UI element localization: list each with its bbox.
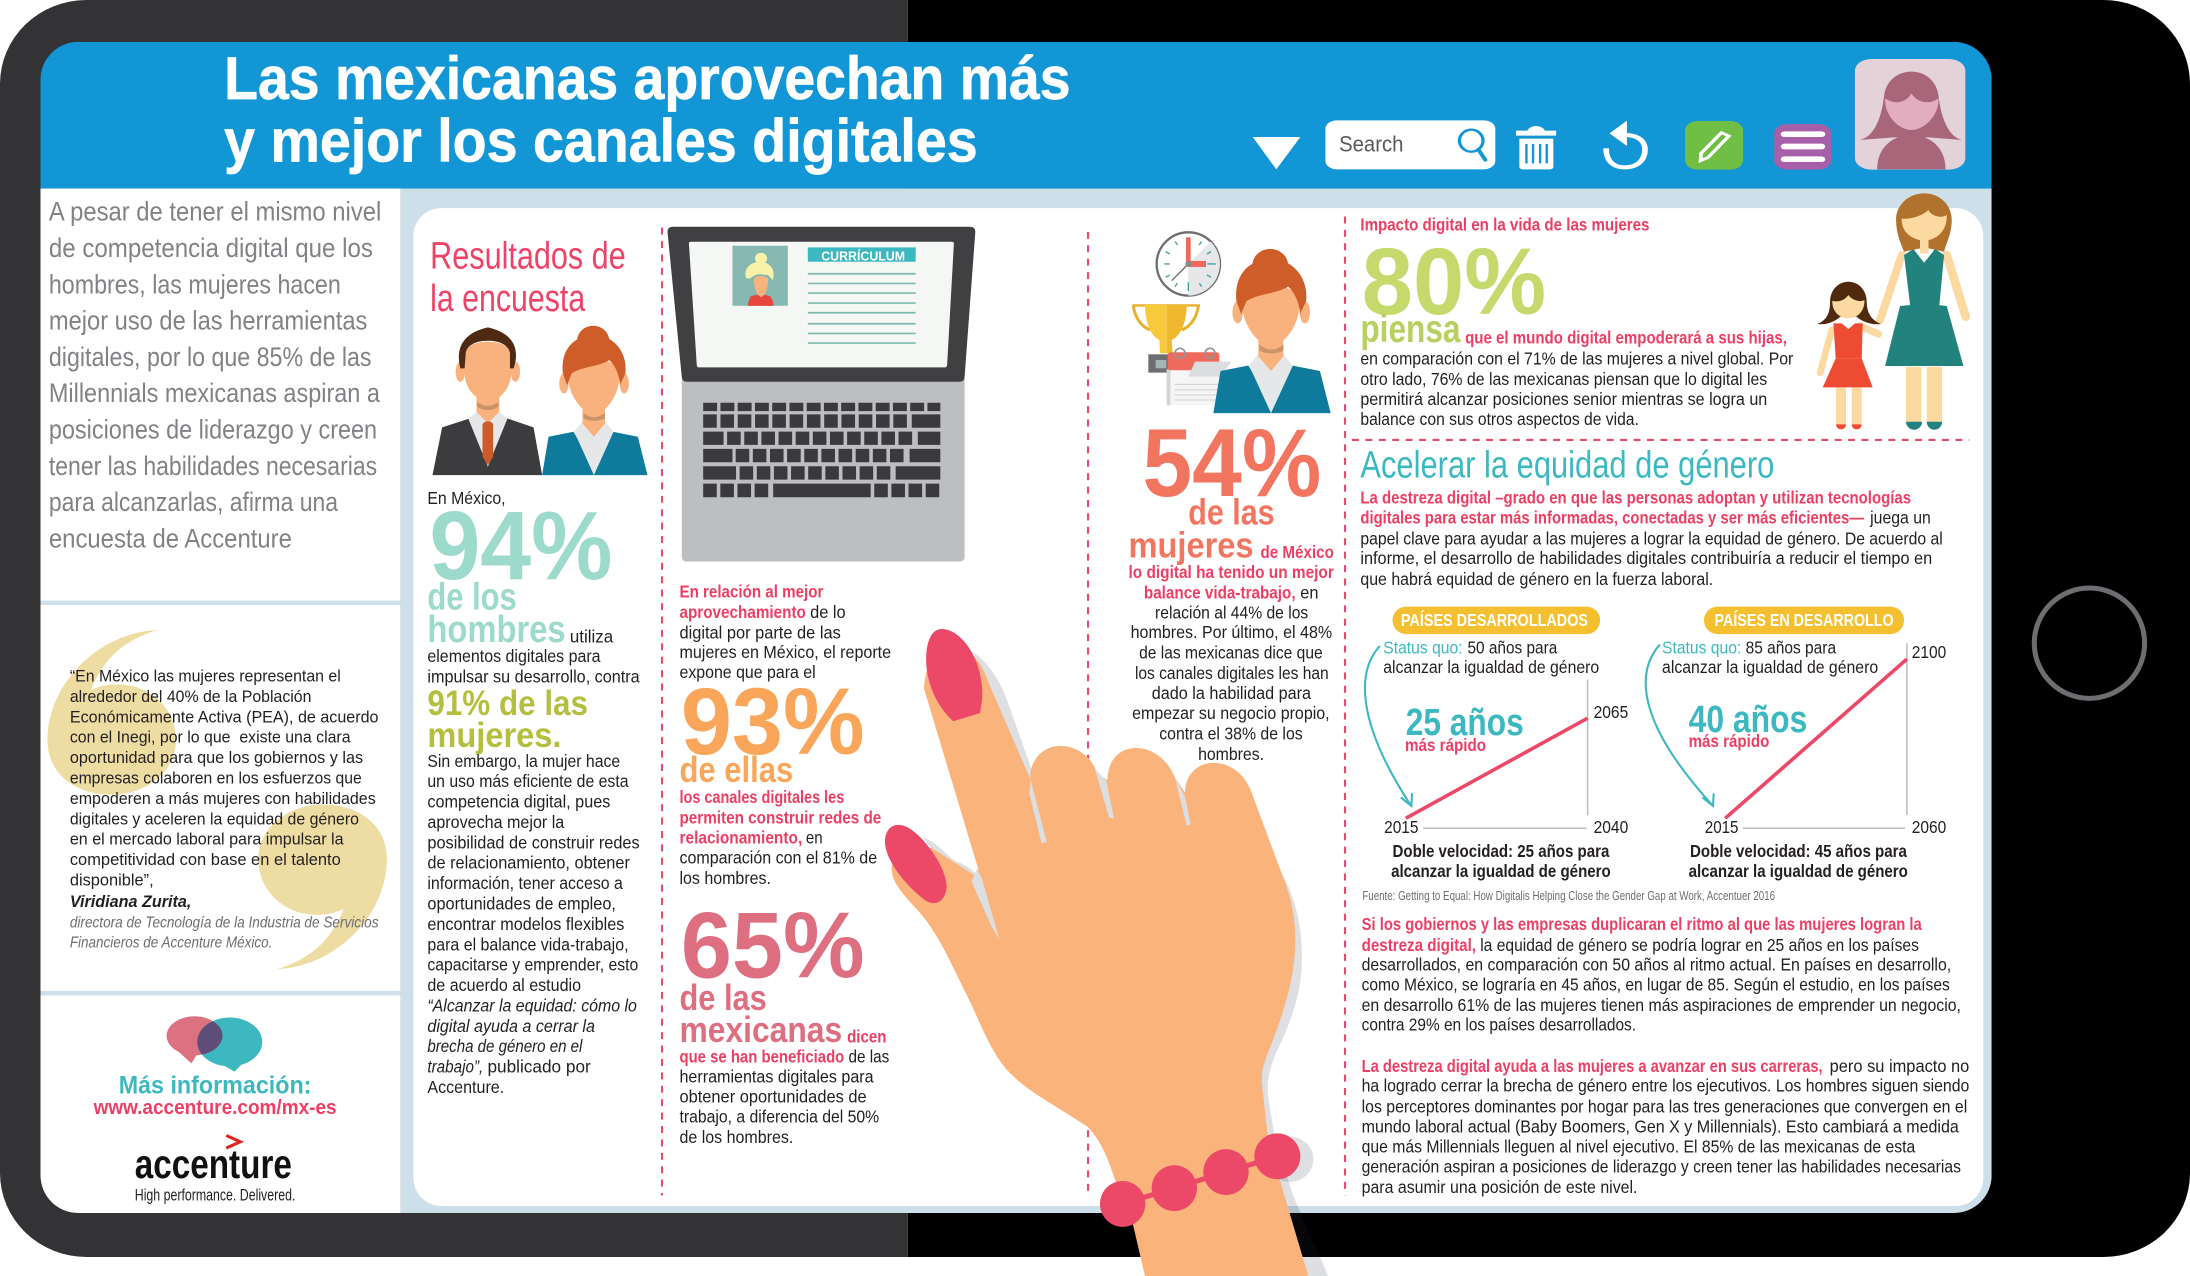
quote text: Viridiana Zurita, bbox=[70, 892, 191, 911]
column 3 text: 54 percent: hombres. bbox=[1198, 744, 1264, 764]
intro text: digitales, por lo que 85% de las bbox=[49, 342, 372, 372]
title: Las mexicanas aprovechan más bbox=[224, 45, 1071, 112]
column 1 text: 94 percent: para el balance vida-trabajo, bbox=[427, 934, 629, 954]
paragraph: destreza digital: informe, el desarrollo de habilidades digitales contribuiría a reducir el tiempo en bbox=[1360, 548, 1932, 568]
column 2 text: 65 percent: de los hombres. bbox=[679, 1127, 793, 1147]
icon: speech bubbles bbox=[167, 1016, 262, 1072]
column 2 text: 93 percent: de lo bbox=[810, 602, 846, 622]
quote text: directora de Tecnología de la Industria de Servicios bbox=[70, 914, 379, 931]
column 2 text: 93 percent: de ellas bbox=[679, 749, 793, 790]
pill label: PAÍSES EN DESARROLLO bbox=[1715, 609, 1894, 630]
column 2 text: 65 percent: obtener oportunidades de bbox=[679, 1087, 867, 1107]
column 3 text: 54 percent: en bbox=[1300, 582, 1318, 602]
accenture logo: High performance. Delivered. bbox=[135, 1186, 295, 1205]
paragraph: carreras: La destreza digital ayuda a las mujeres a avanzar en sus carreras, bbox=[1362, 1056, 1823, 1076]
column 1 text: 94 percent: impulsar su desarrollo, contra bbox=[427, 666, 640, 686]
quote text: Económicamente Activa (PEA), de acuerdo bbox=[70, 707, 379, 726]
chart: países en desarrollo: Status quo: bbox=[1662, 637, 1741, 657]
column 1 text: 94 percent: encontrar modelos flexibles bbox=[427, 914, 625, 934]
column 4 text: 80 percent: en comparación con el 71% de las mujeres a nivel global. Por bbox=[1360, 349, 1794, 369]
column 4 text: 80 percent bbox=[1360, 214, 1794, 429]
column 3 text: 54 percent bbox=[1129, 410, 1334, 764]
intro text: Millennials mexicanas aspiran a bbox=[49, 378, 380, 408]
quote text: con el Inegi, por lo que existe una clara bbox=[70, 728, 351, 747]
paragraph: duplicar el ritmo: como México, se lograría en 45 años, en lugar de 85. Según el estudio, en los países bbox=[1362, 975, 1950, 995]
paragraph: destreza digital: que habrá equidad de género en la fuerza laboral. bbox=[1360, 569, 1713, 589]
more info link: Más información: bbox=[119, 1072, 311, 1100]
quote text: digitales y aceleren la equidad de género bbox=[70, 809, 359, 828]
pill label bbox=[1392, 607, 1600, 634]
column 2 text: 65 percent: de las bbox=[848, 1047, 890, 1067]
illustration: clock, trophy, calendar, businesswoman bbox=[1132, 232, 1331, 413]
column 1 text: 94 percent: aprovecha mejor la bbox=[427, 812, 565, 832]
more info link bbox=[93, 1072, 337, 1119]
heading: Resultados de la encuesta: Resultados de bbox=[430, 235, 626, 277]
paragraph: carreras: los perceptores dominantes por hogar para las tres generaciones que convergen en el bbox=[1362, 1096, 1967, 1116]
chart: países desarrollados: alcanzar la igualdad de género bbox=[1383, 657, 1599, 677]
column 1 text: 94 percent: publicado por bbox=[487, 1057, 591, 1077]
intro text: posiciones de liderazgo y creen bbox=[49, 415, 377, 445]
column 1 text: 94 percent: hombres bbox=[427, 608, 566, 650]
intro text: mejor uso de las herramientas bbox=[49, 306, 367, 336]
column 2 text: 65 percent: trabajo, a diferencia del 50% bbox=[679, 1107, 879, 1127]
paragraph: destreza digital: juega un bbox=[1869, 508, 1931, 528]
column 1 text: 94 percent: 94% bbox=[429, 491, 612, 600]
column 3 text: 54 percent: mujeres bbox=[1129, 524, 1254, 565]
paragraph: carreras: generación aspiran a posiciones de liderazgo y creen tener las habilidades necesarias bbox=[1362, 1157, 1961, 1177]
paragraph: carreras: que más Millennials lleguen al nivel ejecutivo. El 85% de las mexicanas de esta bbox=[1362, 1137, 1916, 1157]
chart: países desarrollados: 2015 bbox=[1384, 817, 1418, 837]
chart: países desarrollados: 2065 bbox=[1594, 702, 1628, 722]
heading: Resultados de la encuesta: la encuesta bbox=[430, 277, 585, 319]
paragraph: destreza digital bbox=[1360, 488, 1943, 589]
search label: Search bbox=[1339, 132, 1403, 157]
paragraph: carreras: ha logrado cerrar la brecha de género entre los ejecutivos. Los hombres siguen siendo bbox=[1362, 1076, 1969, 1096]
paragraph: duplicar el ritmo: Si los gobiernos y las empresas duplicaran el ritmo al que las mujeres logran la bbox=[1362, 914, 1922, 934]
heading: Resultados de la encuesta bbox=[430, 235, 626, 319]
column 1 text: 94 percent bbox=[427, 488, 640, 1097]
source note: Fuente: Getting to Equal: How Digitalis Helping Close the Gender Gap at Work, Accentuer 2016 bbox=[1362, 889, 1775, 903]
paragraph: duplicar el ritmo: la equidad de género se podría lograr en 25 años en los países bbox=[1480, 935, 1919, 955]
column 2 text: 65 percent: de las bbox=[679, 977, 767, 1018]
chart: países en desarrollo: más rápido bbox=[1689, 731, 1769, 751]
column 1 text: 94 percent: de relacionamiento, obtener bbox=[427, 853, 630, 873]
quote text: empoderen a más mujeres con habilidades bbox=[70, 789, 376, 808]
illustration: laptop with curriculum bbox=[667, 227, 975, 561]
icon: dropdown triangle, search box, trash, undo, pencil, menu, avatar bbox=[1253, 59, 1965, 170]
chart: países en desarrollo bbox=[1646, 607, 1947, 881]
column 1 text: 94 percent: de acuerdo al estudio bbox=[427, 975, 581, 995]
column 3 text: 54 percent: balance vida-trabajo, bbox=[1144, 582, 1296, 602]
column 1 text: 94 percent: trabajo”, bbox=[427, 1057, 483, 1077]
quote text: Financieros de Accenture México. bbox=[70, 935, 272, 952]
chart: países en desarrollo: Doble velocidad: 45 años para bbox=[1690, 841, 1907, 861]
pill label bbox=[1704, 607, 1904, 634]
chart: países desarrollados: más rápido bbox=[1405, 735, 1486, 755]
column 2 text: 65 percent: mexicanas bbox=[679, 1009, 842, 1050]
chart: países en desarrollo: 40 años bbox=[1689, 698, 1807, 740]
column 2 text: 93 percent: aprovechamiento bbox=[679, 602, 806, 622]
chart: países en desarrollo: 2100 bbox=[1912, 642, 1947, 662]
column 2 text: 93 percent: permiten construir redes de bbox=[679, 807, 882, 827]
header toolbar bbox=[1253, 59, 1965, 170]
chart: países en desarrollo: alcanzar la igualdad de género bbox=[1689, 861, 1908, 881]
column 2 text: 65 percent bbox=[679, 893, 890, 1147]
quote text: empresas colaboren en los esfuerzos que bbox=[70, 769, 362, 788]
column 1 text: 94 percent: utiliza bbox=[570, 626, 613, 646]
column 4 text: 80 percent: otro lado, 76% de las mexicanas piensan que lo digital les bbox=[1360, 369, 1767, 389]
column 2 text: 93 percent: digital por parte de las bbox=[679, 622, 841, 642]
chart: países desarrollados: Doble velocidad: 25 años para bbox=[1392, 841, 1610, 861]
column 3 text: 54 percent: relación al 44% de los bbox=[1155, 602, 1309, 622]
column 2 text: 93 percent: 93% bbox=[681, 669, 865, 775]
column 1 text: 94 percent: brecha de género en el bbox=[427, 1036, 583, 1056]
chart: países en desarrollo: 2015 bbox=[1705, 817, 1738, 837]
intro text: de competencia digital que los bbox=[49, 233, 373, 263]
paragraph: duplicar el ritmo: desarrollados, en comparación con 50 años al ritmo actual. En países en desarrollo, bbox=[1362, 955, 1951, 975]
column 3 text: 54 percent: contra el 38% de los bbox=[1159, 724, 1303, 744]
paragraph: destreza digital: digitales para estar más informadas, conectadas y ser más eficientes— bbox=[1360, 508, 1865, 528]
more info link: www.accenture.com/mx-es bbox=[93, 1097, 337, 1119]
column 1 text: 94 percent: Accenture. bbox=[427, 1077, 504, 1097]
column 2 text: 93 percent: en bbox=[806, 828, 823, 848]
chart: países desarrollados: Status quo: bbox=[1383, 637, 1463, 657]
quote text: alrededor del 40% de la Población bbox=[70, 687, 311, 706]
chart: países desarrollados: alcanzar la igualdad de género bbox=[1391, 861, 1611, 881]
chart: países desarrollados bbox=[1365, 607, 1629, 881]
dashed dividers bbox=[662, 216, 1969, 1196]
chart: países en desarrollo: 2060 bbox=[1912, 817, 1947, 837]
illustration: pointing hand with bracelet bbox=[885, 629, 1328, 1276]
quote text: “En México las mujeres representan el bbox=[70, 667, 341, 686]
column 1 text: 94 percent: “Alcanzar la equidad: cómo lo bbox=[427, 995, 637, 1015]
column 3 text: 54 percent: de México bbox=[1261, 542, 1334, 562]
chart: países desarrollados: 50 años para bbox=[1467, 637, 1558, 657]
quote text: en el mercado laboral para impulsar la bbox=[70, 830, 344, 849]
column 2 text: 65 percent: que se han beneficiado bbox=[679, 1047, 844, 1067]
column 3 text: 54 percent: dado la habilidad para bbox=[1152, 683, 1311, 703]
paragraph: destreza digital: La destreza digital –grado en que las personas adoptan y utilizan tecnologías bbox=[1360, 488, 1911, 508]
heading: Acelerar la equidad de género: Acelerar la equidad de género bbox=[1360, 444, 1774, 486]
column 1 text: 94 percent: digital ayuda a cerrar la bbox=[427, 1016, 595, 1036]
curriculum label: CURRÍCULUM bbox=[821, 249, 905, 264]
column 3 text: 54 percent: lo digital ha tenido un mejor bbox=[1129, 562, 1334, 582]
icon: opening quote mark bbox=[47, 630, 176, 795]
column 3 text: 54 percent: de las bbox=[1188, 492, 1275, 533]
column 2 text: 93 percent: comparación con el 81% de bbox=[679, 848, 877, 868]
column 2 text: 93 percent: expone que para el bbox=[679, 662, 816, 682]
column 1 text: 94 percent: En México, bbox=[427, 488, 506, 508]
column 2 text: 93 percent: los hombres. bbox=[679, 868, 771, 888]
paragraph: duplicar el ritmo bbox=[1362, 914, 1961, 1035]
column 1 text: 94 percent: elementos digitales para bbox=[427, 646, 601, 666]
chart: países en desarrollo: alcanzar la igualdad de género bbox=[1662, 657, 1878, 677]
column 4 text: 80 percent: balance con sus otros aspectos de vida. bbox=[1360, 409, 1639, 429]
column 3 text: 54 percent: empezar su negocio propio, bbox=[1132, 703, 1330, 723]
column 4 text: 80 percent: que el mundo digital empoderará a sus hijas, bbox=[1465, 328, 1787, 348]
column 1 text: 94 percent: de los bbox=[427, 576, 517, 618]
intro text: encuesta de Accenture bbox=[49, 523, 292, 553]
column 2 text: 65 percent: herramientas digitales para bbox=[679, 1066, 874, 1086]
quote text: oportunidad para que los gobiernos y las bbox=[70, 748, 363, 767]
chart: países desarrollados: 25 años bbox=[1406, 701, 1524, 743]
illustration: mother and daughter bbox=[1817, 193, 1966, 430]
column 4 text: 80 percent: permitirá alcanzar posiciones senior mientras se logra un bbox=[1360, 389, 1767, 409]
column 1 text: 94 percent: información, tener acceso a bbox=[427, 873, 623, 893]
column 2 text: 93 percent: los canales digitales les bbox=[679, 787, 844, 807]
title: y mejor los canales digitales bbox=[224, 107, 978, 174]
column 1 text: 94 percent: oportunidades de empleo, bbox=[427, 894, 616, 914]
paragraph: carreras: para asumir una posición de este nivel. bbox=[1362, 1177, 1637, 1197]
accenture logo bbox=[135, 1135, 295, 1205]
column 1 text: 94 percent: mujeres. bbox=[427, 716, 561, 755]
paragraph: destreza digital: papel clave para ayudar a las mujeres a lograr la equidad de género. De acuerdo al bbox=[1360, 528, 1943, 548]
column 1 text: 94 percent: capacitarse y emprender, esto bbox=[427, 955, 638, 975]
paragraph: duplicar el ritmo: destreza digital, bbox=[1362, 935, 1476, 955]
column 3 text: 54 percent: de las mexicanas dice que bbox=[1139, 643, 1323, 663]
column 3 text: 54 percent: 54% bbox=[1142, 410, 1321, 517]
pill label: PAÍSES DESARROLLADOS bbox=[1401, 609, 1588, 630]
home button bbox=[2034, 588, 2145, 698]
quote text: competitividad con base en el talento bbox=[70, 850, 341, 869]
column 1 text: 94 percent: un uso más eficiente de esta bbox=[427, 771, 629, 791]
column 1 text: 94 percent: Sin embargo, la mujer hace bbox=[427, 751, 620, 771]
quote text: disponible”, bbox=[70, 870, 154, 889]
column 2 text: 93 percent: En relación al mejor bbox=[679, 581, 824, 601]
intro text: A pesar de tener el mismo nivel bbox=[49, 197, 381, 227]
paragraph: carreras: mundo laboral actual (Baby Boomers, Gen X y Millennials). Esto cambiará a medida bbox=[1362, 1116, 1959, 1136]
accenture logo: accenture bbox=[135, 1141, 292, 1187]
column 2 text: 65 percent: dicen bbox=[847, 1027, 886, 1047]
column 3 text: 54 percent: hombres. Por último, el 48% bbox=[1131, 622, 1332, 642]
intro text: para alcanzarlas, afirma una bbox=[49, 487, 338, 517]
intro text bbox=[49, 197, 381, 553]
column 1 text: 94 percent: 91% de las bbox=[427, 684, 588, 723]
column 2 text: 93 percent bbox=[679, 581, 891, 888]
chart: países desarrollados: 2040 bbox=[1594, 817, 1629, 837]
paragraph: duplicar el ritmo: en desarrollo 61% de las mujeres tienen más aspiraciones de emprender un negocio, bbox=[1362, 995, 1961, 1015]
column 1 text: 94 percent: posibilidad de construir redes bbox=[427, 832, 640, 852]
illustration: man and woman bbox=[432, 326, 647, 475]
intro text: tener las habilidades necesarias bbox=[49, 451, 377, 481]
column 2 text: 93 percent: relacionamiento, bbox=[679, 828, 802, 848]
paragraph: carreras: pero su impacto no bbox=[1830, 1056, 1969, 1076]
column 4 text: 80 percent: piensa bbox=[1360, 308, 1461, 351]
icon: closing quote mark bbox=[258, 804, 387, 969]
content panel bbox=[413, 208, 1983, 1206]
paragraph: carreras bbox=[1362, 1056, 1969, 1197]
column 1 text: 94 percent: competencia digital, pues bbox=[427, 792, 611, 812]
column 4 text: 80 percent: 80% bbox=[1362, 229, 1546, 335]
column 3 text: 54 percent: los canales digitales les han bbox=[1135, 663, 1329, 683]
chart: países en desarrollo: 85 años para bbox=[1746, 637, 1836, 657]
intro text: hombres, las mujeres hacen bbox=[49, 269, 341, 299]
column 4 text: 80 percent: Impacto digital en la vida de las mujeres bbox=[1360, 214, 1649, 234]
column 2 text: 65 percent: 65% bbox=[681, 893, 865, 998]
quote text bbox=[70, 667, 379, 952]
title bbox=[224, 45, 1071, 174]
paragraph: duplicar el ritmo: contra 29% en los países desarrollados. bbox=[1362, 1015, 1636, 1035]
column 2 text: 93 percent: mujeres en México, el reporte bbox=[679, 642, 891, 662]
